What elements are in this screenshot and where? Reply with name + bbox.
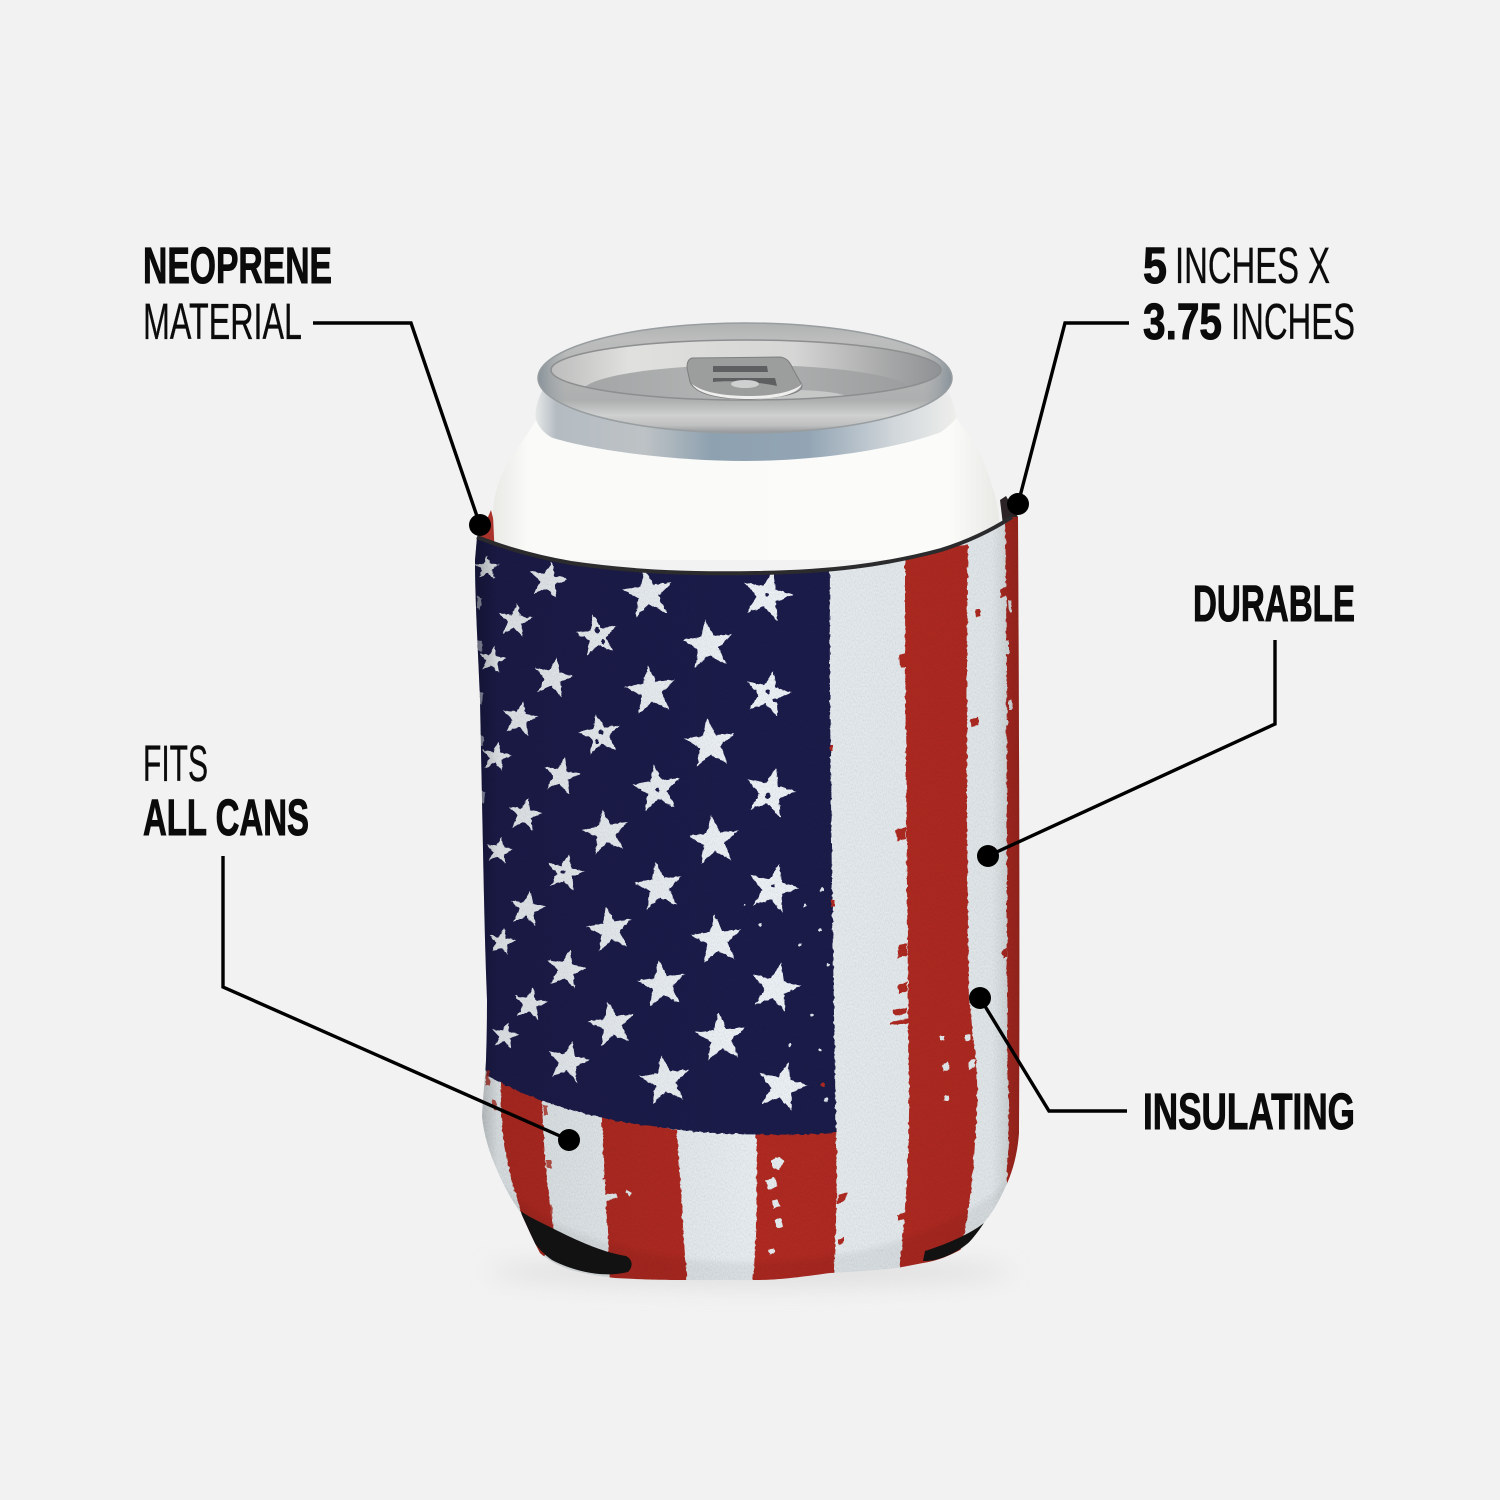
bottom slot left bbox=[521, 1211, 632, 1274]
can neck bbox=[535, 385, 956, 461]
label bbox=[143, 735, 309, 846]
bottom slot right bbox=[923, 1222, 984, 1261]
sleeve top edge bbox=[477, 517, 1012, 573]
navy canton bbox=[468, 530, 836, 1135]
leader line bbox=[223, 856, 569, 1140]
label: FITS bbox=[143, 735, 208, 792]
white fabric base bbox=[470, 510, 1030, 1290]
can rim bbox=[538, 323, 952, 433]
label: 3.75 bbox=[1143, 293, 1222, 350]
distressed print bbox=[468, 510, 1025, 1285]
rim side shading bbox=[538, 323, 952, 433]
label: DURABLE bbox=[1193, 575, 1355, 632]
label: INCHES X bbox=[1175, 237, 1330, 294]
can: top and shoulder bbox=[478, 323, 1018, 560]
callout: fits all cans bbox=[143, 735, 580, 1151]
dot bbox=[969, 987, 991, 1009]
left edge star fragments bbox=[477, 595, 485, 803]
sleeve back edge right bbox=[1000, 496, 1018, 525]
pull tab bbox=[687, 357, 802, 399]
distress specks: red stripes bbox=[604, 600, 1012, 1255]
bottom shading bbox=[510, 1187, 1005, 1280]
distress specks: canton bbox=[744, 887, 830, 1102]
fabric grain bbox=[465, 505, 1030, 1295]
dot bbox=[558, 1129, 580, 1151]
ground shadow bbox=[488, 1258, 1012, 1286]
inner rim edge bbox=[551, 340, 941, 400]
can shoulder bbox=[493, 417, 1000, 560]
red stripes bbox=[500, 510, 1025, 1285]
stars bbox=[474, 555, 813, 1114]
leader line bbox=[313, 323, 480, 525]
label bbox=[1143, 237, 1355, 350]
label: MATERIAL bbox=[143, 293, 302, 350]
label: NEOPRENE bbox=[143, 237, 332, 294]
label bbox=[143, 237, 332, 350]
label: 5 bbox=[1143, 237, 1167, 294]
label: INSULATING bbox=[1143, 1083, 1355, 1140]
label: ALL CANS bbox=[143, 789, 309, 846]
callout: insulating bbox=[969, 987, 1355, 1140]
dot bbox=[469, 514, 491, 536]
navy wear marks inside stars bbox=[561, 593, 777, 888]
distress specks: left edge bbox=[486, 1070, 553, 1219]
sleeve side shading bbox=[470, 510, 1025, 1290]
label: INCHES bbox=[1231, 293, 1355, 350]
sleeve back edge bbox=[478, 510, 500, 545]
callout: durable bbox=[977, 575, 1355, 867]
leader line bbox=[988, 640, 1275, 856]
recessed lid panel bbox=[586, 366, 888, 400]
leader line bbox=[980, 998, 1127, 1111]
can lid bbox=[551, 340, 941, 400]
callout: dimensions bbox=[1007, 237, 1355, 515]
dot bbox=[1007, 493, 1029, 515]
callout: neoprene material bbox=[143, 237, 491, 536]
can cooler sleeve bbox=[465, 505, 1030, 1300]
dot bbox=[977, 845, 999, 867]
product: flag can cooler on aluminum can bbox=[465, 323, 1030, 1300]
leader line bbox=[1018, 323, 1129, 504]
